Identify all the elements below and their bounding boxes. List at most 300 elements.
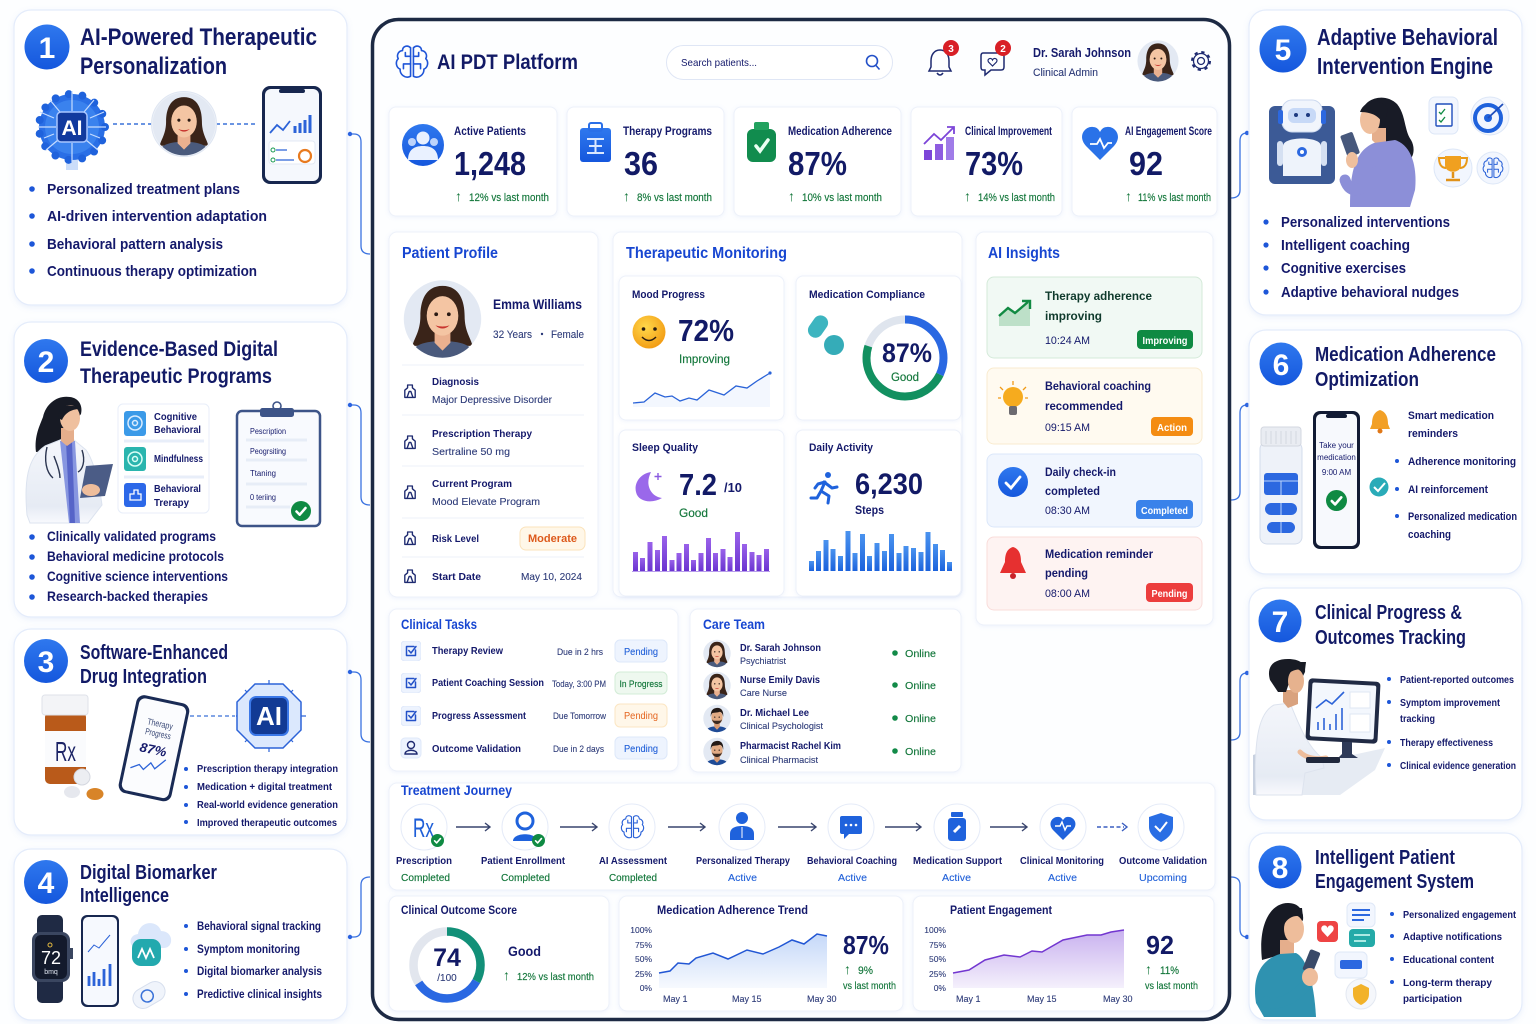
number badge 6: 6 xyxy=(1273,349,1289,382)
bullet list 5 xyxy=(1263,215,1459,301)
heading 1: AI-Powered Therapeutic xyxy=(80,24,317,51)
engagement value: 11% xyxy=(1160,965,1179,977)
bullet list 7 xyxy=(1387,674,1516,772)
bullet list 1: Behavioral pattern analysis xyxy=(47,236,223,253)
team member: Sarah Johnson: Online xyxy=(905,648,936,660)
bullet list 8: Long-term therapy xyxy=(1403,977,1492,989)
KPI card: therapy programs: 36 xyxy=(624,145,658,182)
step: patient enrollment: Completed xyxy=(501,872,550,884)
heading 7: Outcomes Tracking xyxy=(1315,627,1466,649)
icon: AI chip xyxy=(236,680,306,752)
icon: clipboard: 0 teriing xyxy=(250,493,276,502)
heading: patient profile: Patient Profile xyxy=(402,245,498,262)
icon: AI brain xyxy=(38,91,106,170)
item: cognitive behavioral xyxy=(124,411,201,436)
icon: teal check xyxy=(1370,478,1388,496)
heading 7: Clinical Progress & xyxy=(1315,602,1462,624)
step: clinical monitoring xyxy=(1020,804,1104,884)
illustration: woman with phone xyxy=(1255,903,1321,1017)
card: medication compliance: 87% xyxy=(882,338,932,368)
bullet list 8: Educational content xyxy=(1403,954,1494,966)
KPI card: therapy programs: ↑ xyxy=(623,188,630,204)
row: diagnosis: Diagnosis xyxy=(432,376,479,388)
icons: engagement messages xyxy=(1317,903,1376,1009)
icon: clipboard: Pescription xyxy=(250,427,286,436)
step: outcome validation: Upcoming xyxy=(1139,872,1187,884)
icon: smartwatch: bmq xyxy=(44,969,58,976)
icon: messages xyxy=(981,40,1011,75)
number badge 8 xyxy=(1258,846,1302,888)
line chart: adherence: 100% xyxy=(630,925,652,935)
heading 1: Personalization xyxy=(80,53,227,80)
team member: Rachel Kim xyxy=(703,738,936,766)
card: mood progress: Mood Progress xyxy=(632,289,705,301)
heading 2: Therapeutic Programs xyxy=(80,365,272,388)
list 6: AI reinforcement xyxy=(1408,484,1488,496)
task: progress assessment: Due Tomorrow xyxy=(553,711,606,722)
heading 3 xyxy=(80,642,228,688)
heading: Clinical Outcome Score xyxy=(401,905,517,917)
number badge 3 xyxy=(24,639,68,683)
step: medication support xyxy=(913,804,1002,884)
insight: daily check-in: Completed xyxy=(1141,505,1188,517)
insight: daily check-in: 08:30 AM xyxy=(1045,505,1090,517)
heading 4: Intelligence xyxy=(80,885,169,907)
panel: clinical outcome score xyxy=(389,896,609,1011)
insight: adherence improving: improving xyxy=(1045,309,1102,323)
number badge 6 xyxy=(1260,342,1302,386)
bullet list 3 xyxy=(184,763,338,829)
step: behavioral coaching: Active xyxy=(838,872,867,884)
card: mood progress: 72% xyxy=(678,313,734,348)
connectors xyxy=(348,131,1249,939)
bullet list 1: AI-driven intervention adaptation xyxy=(47,208,267,225)
team member: Rachel Kim: Clinical Pharmacist xyxy=(740,755,818,766)
platform title: AI PDT Platform xyxy=(437,51,578,74)
number badge 4 xyxy=(24,860,68,904)
card: daily activity: Daily Activity xyxy=(809,442,874,454)
task: outcome validation: Pending xyxy=(624,744,658,755)
team member: Emily Davis: Care Nurse xyxy=(740,688,787,699)
score label: Good xyxy=(508,943,541,959)
avatar: Emma Williams xyxy=(403,280,482,358)
item: cognitive behavioral: Cognitive xyxy=(154,411,197,423)
row: current program: Current Program xyxy=(432,478,512,490)
team member: Sarah Johnson: Psychiatrist xyxy=(740,656,786,667)
line chart: engagement: 0% xyxy=(934,983,946,993)
panel: care team xyxy=(690,609,961,772)
item: behavioral therapy: Behavioral xyxy=(154,483,201,495)
team member: Rachel Kim: Pharmacist Rachel Kim xyxy=(740,740,841,752)
trend value xyxy=(843,930,896,992)
KPI card: AI engagement score: 92 xyxy=(1129,145,1163,182)
panel: therapeutic monitoring xyxy=(613,232,962,597)
team member: Michael Lee: Clinical Psychologist xyxy=(740,721,823,732)
icon: notifications bell: 3 xyxy=(948,44,954,55)
card: daily activity: 6,230 xyxy=(855,468,923,501)
insight: daily check-in xyxy=(987,454,1202,527)
task: patient coaching session xyxy=(401,672,667,694)
panel 7: clinical progress and outcomes tracking xyxy=(1249,588,1522,820)
icon: sensor xyxy=(129,978,169,1012)
item: behavioral therapy xyxy=(124,483,201,509)
heading: AI insights: AI Insights xyxy=(988,245,1060,262)
task: progress assessment: Progress Assessment xyxy=(432,710,526,722)
panel: medication adherence trend xyxy=(619,896,903,1011)
row: start date: May 10, 2024 xyxy=(521,571,582,583)
line chart: adherence: May 30 xyxy=(807,994,837,1004)
user name and role xyxy=(1033,45,1131,79)
insight: behavioral coaching: Action xyxy=(1157,422,1187,434)
icon: phone reminder: Take your xyxy=(1319,441,1354,450)
icon: cloud analytics xyxy=(130,923,171,966)
heading 2 xyxy=(80,338,278,388)
bullet list 7: tracking xyxy=(1400,713,1435,725)
heading 6: Optimization xyxy=(1315,369,1419,391)
patient name and demographics xyxy=(493,296,584,341)
row: diagnosis xyxy=(405,376,552,406)
step: AI assessment: Completed xyxy=(609,872,657,884)
row: current program xyxy=(405,478,540,508)
bullet list 7: Symptom improvement xyxy=(1400,697,1500,709)
line chart: engagement: May 30 xyxy=(1103,994,1133,1004)
heading: clinical tasks: Clinical Tasks xyxy=(401,616,477,632)
line chart: engagement: May 1 xyxy=(956,994,981,1004)
line chart: adherence: May 15 xyxy=(732,994,762,1004)
list 6: reminders xyxy=(1408,428,1458,440)
KPI card: medication adherence: ↑ xyxy=(788,188,795,204)
illustration: robot coach xyxy=(1269,100,1335,184)
task: therapy review: Pending xyxy=(624,647,658,658)
list 6: Adherence monitoring xyxy=(1408,456,1516,468)
list 6: Smart medication xyxy=(1408,410,1494,422)
heading 6 xyxy=(1315,344,1496,391)
number badge 1 xyxy=(24,24,70,70)
heading 7 xyxy=(1315,602,1466,649)
bullet list 2: Cognitive science interventions xyxy=(47,568,228,584)
icon: AI brain: AI xyxy=(62,117,82,140)
panel: patient profile xyxy=(389,232,598,597)
user name and role: Clinical Admin xyxy=(1033,67,1098,79)
bullet list 5: Personalized interventions xyxy=(1281,215,1450,231)
icon: clipboard xyxy=(237,402,320,526)
number badge 3: 3 xyxy=(38,646,54,679)
bullet list 4: Symptom monitoring xyxy=(197,944,300,956)
heading: treatment journey: Treatment Journey xyxy=(401,783,512,798)
line chart: adherence: May 1 xyxy=(663,994,688,1004)
engagement value xyxy=(1145,930,1198,992)
line chart: engagement xyxy=(924,925,1133,1004)
step: personalized therapy: Personalized Therapy xyxy=(696,855,790,867)
avatar: clinician xyxy=(1137,40,1179,82)
bullet list 5: Cognitive exercises xyxy=(1281,261,1406,277)
KPI card: AI engagement score: AI Engagement Score xyxy=(1125,126,1212,138)
trend value: ↑ xyxy=(844,961,851,977)
task: outcome validation: Due in 2 days xyxy=(553,744,604,755)
step: clinical monitoring: Active xyxy=(1048,872,1077,884)
list 6: coaching xyxy=(1408,529,1451,541)
KPI card: active patients xyxy=(389,107,557,216)
line chart: engagement: 75% xyxy=(929,940,946,950)
heading 4: Digital Biomarker xyxy=(80,862,217,884)
icon: phone reminder: medication xyxy=(1317,453,1356,462)
team member: Michael Lee: Online xyxy=(905,713,936,725)
number badge 2 xyxy=(24,339,68,383)
icon: brain logo xyxy=(396,46,428,77)
connector dashes xyxy=(113,123,258,125)
step: outcome validation xyxy=(1119,804,1207,884)
panel: patient engagement xyxy=(913,896,1214,1011)
insight: behavioral coaching: 09:15 AM xyxy=(1045,422,1090,434)
team member: Emily Davis: Online xyxy=(905,680,936,692)
bullet list 1: Personalized treatment plans xyxy=(47,181,240,198)
step: AI assessment: AI Assessment xyxy=(599,855,667,867)
list 6: Personalized medication xyxy=(1408,511,1517,523)
journey arrows xyxy=(456,823,1127,831)
bullet list 7: Therapy effectiveness xyxy=(1400,737,1493,749)
number badge 7: 7 xyxy=(1272,606,1288,639)
bullet list 3: Prescription therapy integration xyxy=(197,763,338,775)
task: patient coaching session: In Progress xyxy=(620,679,663,690)
step: clinical monitoring: Clinical Monitoring xyxy=(1020,855,1104,867)
insight: behavioral coaching: Behavioral coaching xyxy=(1045,379,1151,393)
step: patient enrollment: Patient Enrollment xyxy=(481,855,565,867)
icon: phone chart xyxy=(81,915,119,1007)
card: daily activity: Steps xyxy=(855,503,884,517)
step: medication support: Medication Support xyxy=(913,855,1002,867)
icon: pill bottle xyxy=(1260,427,1302,544)
panel 1: AI-powered therapeutic personalization xyxy=(14,10,347,305)
bullet list 1 xyxy=(29,181,267,280)
card: mood progress xyxy=(619,276,784,420)
line chart: engagement: May 15 xyxy=(1027,994,1057,1004)
illustration: clinician at computer xyxy=(1253,659,1385,795)
icon: phone therapy progress: Progress xyxy=(144,726,172,741)
step: personalized therapy xyxy=(696,804,790,884)
heading 3: Software-Enhanced xyxy=(80,642,228,664)
number badge 7 xyxy=(1258,600,1302,642)
icon: Rx bottle: Rx xyxy=(55,736,76,767)
connector dashes xyxy=(190,715,235,717)
icon: phone therapy progress xyxy=(117,694,191,803)
bullet list 3: Real-world evidence generation xyxy=(197,799,338,811)
card: sleep quality: /10 xyxy=(724,481,742,495)
row: risk level xyxy=(405,527,585,550)
list 6 xyxy=(1395,410,1517,541)
icon: notifications bell xyxy=(929,40,959,75)
engagement value: ↑ xyxy=(1145,961,1152,977)
KPI card: clinical improvement: 73% xyxy=(965,145,1023,182)
step: prescription: Prescription xyxy=(396,855,452,867)
KPI card: active patients: ↑ xyxy=(455,188,462,204)
step: patient enrollment xyxy=(481,804,565,884)
card: sleep quality: Good xyxy=(679,506,708,520)
task: outcome validation: Outcome Validation xyxy=(432,743,521,755)
heading 4 xyxy=(80,862,217,907)
KPI card: medication adherence: 10% vs last month xyxy=(802,192,882,204)
line chart: engagement: 50% xyxy=(929,954,946,964)
bullet list 1: Continuous therapy optimization xyxy=(47,263,257,280)
KPI card: therapy programs: Therapy Programs xyxy=(623,126,712,138)
row: prescription therapy: Sertraline 50 mg xyxy=(432,446,510,458)
donut gauge: 74 of 100: 74 xyxy=(433,944,461,972)
item: behavioral therapy: Trerapy xyxy=(154,497,189,509)
icon: messages: 2 xyxy=(1000,44,1006,55)
user name and role: Dr. Sarah Johnson xyxy=(1033,45,1131,60)
bullet list 8: Personalized engagement xyxy=(1403,909,1516,921)
heading 8: Intelligent Patient xyxy=(1315,847,1455,869)
panel 3: software-enhanced drug integration xyxy=(14,629,347,835)
bullet list 2: Research-backed therapies xyxy=(47,588,208,604)
insight: daily check-in: completed xyxy=(1045,484,1100,498)
step: personalized therapy: Active xyxy=(728,872,757,884)
card: sleep quality: Sleep Quality xyxy=(632,442,699,454)
bullet list 5: Adaptive behavioral nudges xyxy=(1281,285,1459,301)
row: start date xyxy=(405,570,582,583)
bullet list 2: Clinically validated programs xyxy=(47,528,216,544)
row: risk level: Risk Level xyxy=(432,533,479,545)
item: mindfulness: Mindfulness xyxy=(154,453,203,465)
KPI card: clinical improvement: Clinical Improvement xyxy=(965,126,1052,138)
step: outcome validation: Outcome Validation xyxy=(1119,855,1207,867)
icon: phone therapy progress: 87% xyxy=(138,739,168,760)
bullet list 5: Intelligent coaching xyxy=(1281,238,1410,254)
heading: Medication Adherence Trend xyxy=(657,905,808,917)
task: progress assessment xyxy=(401,704,667,727)
donut gauge: 74 of 100: /100 xyxy=(437,973,457,984)
team member: Emily Davis xyxy=(703,672,936,700)
team member: Michael Lee: Dr. Michael Lee xyxy=(740,707,809,719)
KPI card: active patients: 12% vs last month xyxy=(469,192,549,204)
card: medication compliance: Good xyxy=(891,372,919,384)
task: outcome validation xyxy=(401,737,667,759)
task: patient coaching session: Today, 3:00 PM xyxy=(552,679,606,689)
icon: settings gear xyxy=(1192,52,1210,70)
heading 5: Intervention Engine xyxy=(1317,53,1493,79)
task: therapy review: Therapy Review xyxy=(432,645,504,657)
bullet list 3: Medication + digital treatment xyxy=(197,781,332,793)
insight: medication reminder: Medication reminder xyxy=(1045,547,1153,561)
number badge 5 xyxy=(1260,26,1306,72)
task: progress assessment: Pending xyxy=(624,711,658,722)
heading: Patient Engagement xyxy=(950,905,1052,917)
KPI card: active patients: 1,248 xyxy=(454,145,526,182)
bullet list 4: Predictive clinical insights xyxy=(197,989,322,1001)
line chart: adherence: 25% xyxy=(635,969,652,979)
icon: clipboard: Ttaning xyxy=(250,469,276,478)
heading 3: Drug Integration xyxy=(80,666,207,688)
row: current program: Mood Elevate Program xyxy=(432,496,540,508)
line chart: engagement: 25% xyxy=(929,969,946,979)
number badge 1: 1 xyxy=(39,32,55,65)
heading 5: Adaptive Behavioral xyxy=(1317,24,1498,50)
line chart: adherence: 0% xyxy=(640,983,652,993)
trend value: 9% xyxy=(858,965,873,977)
card: mood progress: Improving xyxy=(679,354,730,366)
score label: ↑ xyxy=(503,967,510,983)
card: sleep quality: 7.2 xyxy=(679,467,717,502)
step: behavioral coaching xyxy=(807,804,897,884)
panel 4: digital biomarker intelligence xyxy=(14,849,347,1020)
bullet list 8: Adaptive notifications xyxy=(1403,931,1502,943)
icon: phone therapy progress: Therapy xyxy=(146,716,174,732)
insight: adherence improving: Improving xyxy=(1142,335,1188,347)
line chart: adherence: 75% xyxy=(635,940,652,950)
icon: Rx bottle xyxy=(42,695,104,800)
task: therapy review xyxy=(401,640,667,662)
icon: phone reminder: 9:00 AM xyxy=(1322,468,1352,477)
row: prescription therapy xyxy=(405,428,532,458)
trend value: 87% xyxy=(843,930,889,960)
insight: daily check-in: Daily check-in xyxy=(1045,465,1116,479)
team member: Sarah Johnson: Dr. Sarah Johnson xyxy=(740,642,821,654)
heading: therapeutic monitoring: Therapeutic Monitoring xyxy=(626,245,787,262)
KPI card: medication adherence: 87% xyxy=(788,145,847,182)
bullet list 2: Behavioral medicine protocols xyxy=(47,548,224,564)
KPI card: AI engagement score: 11% vs last month xyxy=(1138,192,1211,204)
insight: medication reminder: pending xyxy=(1045,566,1088,580)
insight: behavioral coaching: recommended xyxy=(1045,399,1123,413)
icon: smartwatch xyxy=(32,915,73,1003)
engagement value: 92 xyxy=(1146,930,1174,960)
patient name and demographics: Female xyxy=(551,329,584,341)
header bar xyxy=(396,40,1210,82)
card: daily activity xyxy=(796,430,961,596)
task: therapy review: Due in 2 hrs xyxy=(557,647,603,658)
line chart: adherence: 50% xyxy=(635,954,652,964)
team member: Michael Lee xyxy=(703,704,936,732)
team member: Rachel Kim: Online xyxy=(905,746,936,758)
step: medication support: Active xyxy=(942,872,971,884)
number badge 5: 5 xyxy=(1275,34,1291,67)
heading 5 xyxy=(1317,24,1498,79)
illustration: woman with phone xyxy=(1340,98,1416,207)
team member: Emily Davis: Nurse Emily Davis xyxy=(740,674,820,686)
insight: behavioral coaching xyxy=(987,368,1202,444)
card: therapy types xyxy=(118,404,209,513)
patient name and demographics: Emma Williams xyxy=(493,296,582,312)
panel: treatment journey xyxy=(389,783,1215,890)
bullet list 8 xyxy=(1390,909,1516,1005)
insight: adherence improving xyxy=(987,277,1202,358)
search field xyxy=(666,46,892,80)
step: prescription: Completed xyxy=(401,872,450,884)
avatar: patient xyxy=(152,92,216,156)
panel 5: adaptive behavioral intervention engine xyxy=(1249,10,1522,315)
panel: clinical tasks xyxy=(389,609,678,771)
step: prescription: Rx xyxy=(413,813,434,843)
icon: clipboard: Peogrsiting xyxy=(250,447,286,456)
number badge 8: 8 xyxy=(1272,852,1288,885)
KPI card: clinical improvement: 14% vs last month xyxy=(978,192,1055,204)
row: start date: Start Date xyxy=(432,571,481,583)
search field: Search patients... xyxy=(681,57,757,69)
heading 6: Medication Adherence xyxy=(1315,344,1496,366)
bullet list 4: Behavioral signal tracking xyxy=(197,921,321,933)
bullet list 2 xyxy=(29,528,228,604)
line chart: adherence xyxy=(630,925,837,1004)
KPI card: AI engagement score xyxy=(1072,107,1217,216)
step: behavioral coaching: Behavioral Coaching xyxy=(807,855,897,867)
step: AI assessment xyxy=(599,804,667,884)
heading 8 xyxy=(1315,847,1474,893)
insight: medication reminder: Pending xyxy=(1152,588,1188,600)
row: diagnosis: Major Depressive Disorder xyxy=(432,394,552,406)
dashboard device frame xyxy=(372,20,1230,1020)
bullet list 4 xyxy=(184,921,322,1001)
KPI card: AI engagement score: ↑ xyxy=(1125,188,1132,204)
team member: Sarah Johnson xyxy=(703,640,936,668)
